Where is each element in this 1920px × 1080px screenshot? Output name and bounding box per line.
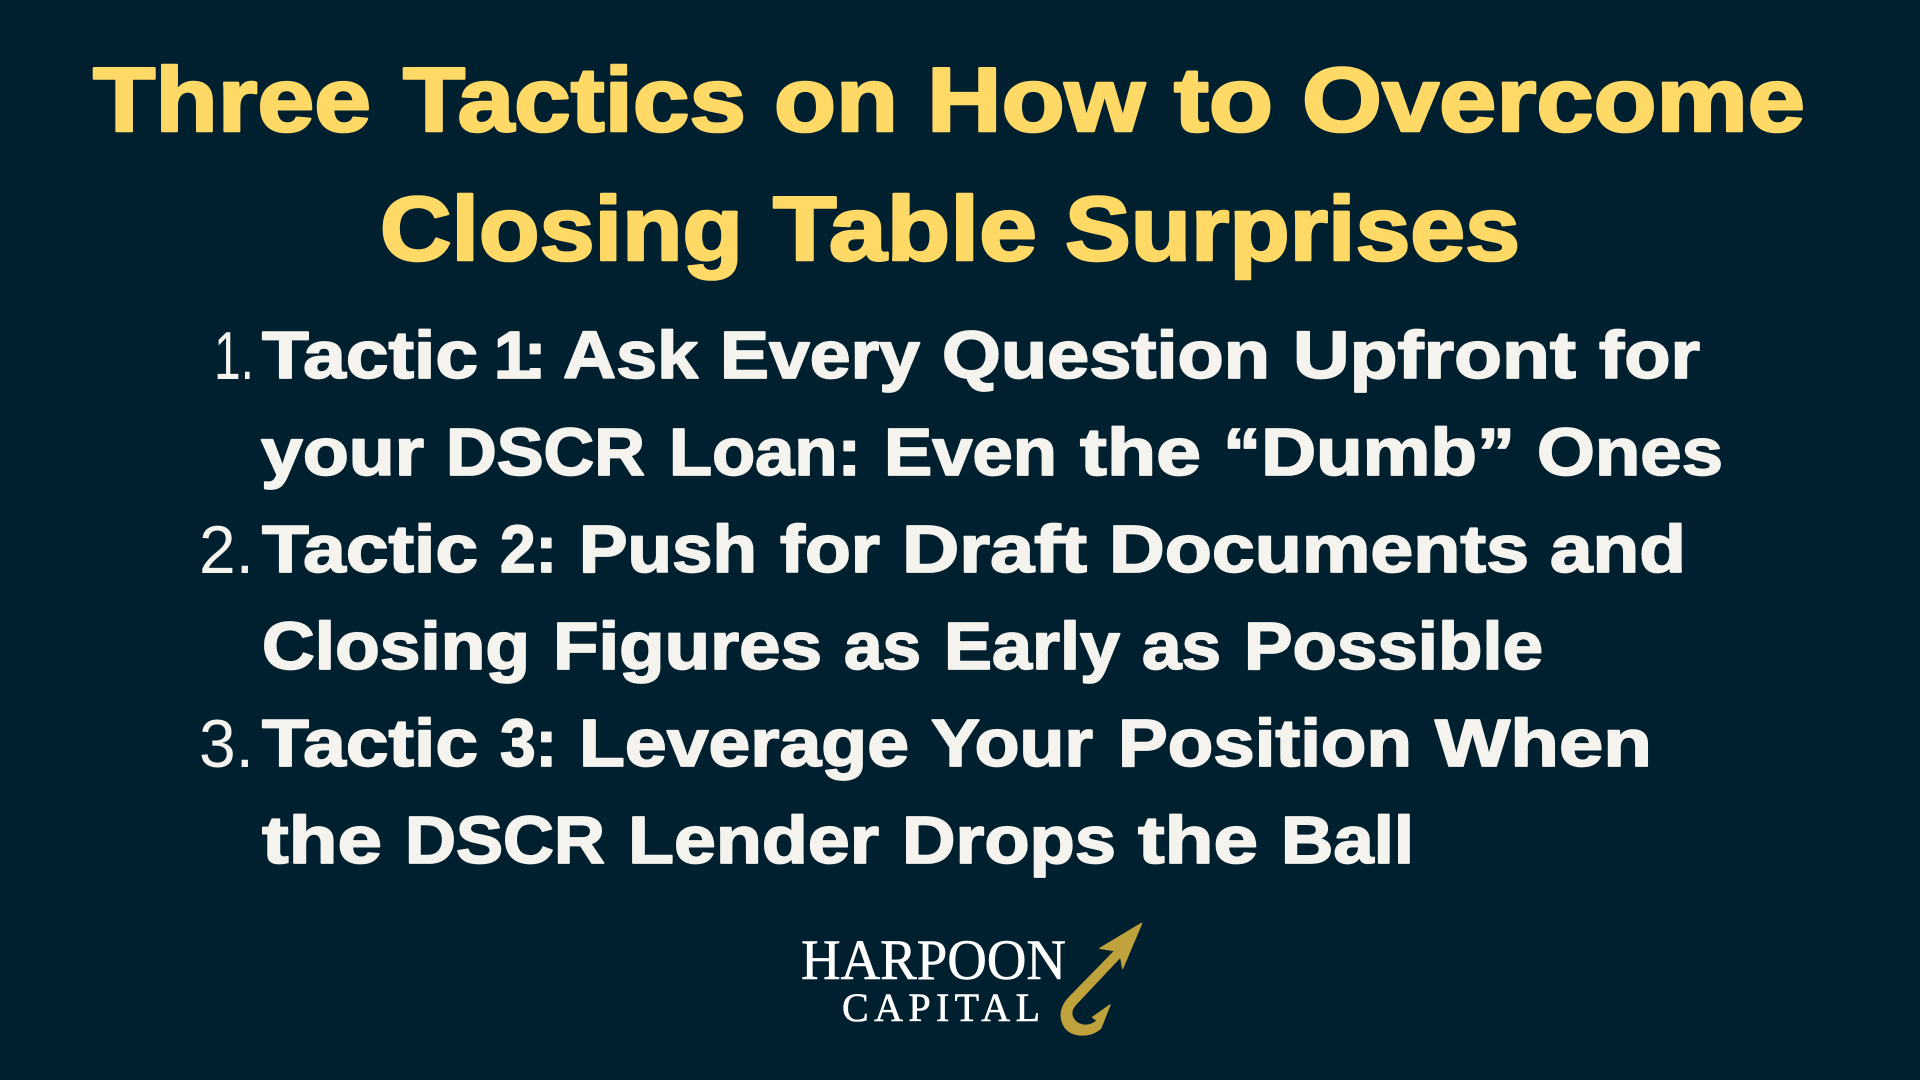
tactic 1: Question [942,318,1270,393]
tactic 3: Tactic [262,706,478,781]
tactic 2: 2. [199,512,254,588]
tactic 1: Ask [563,318,699,393]
tactic 2: as [844,609,921,684]
tactic 2: Documents [1109,512,1529,587]
tactic 2 [199,512,1686,684]
tactic 1: Ones [1537,415,1723,490]
logo wordmark [801,929,1066,1030]
logo wordmark: HARPOON [801,929,1066,992]
tactic 2: Figures [553,609,822,684]
tactic 3: Drops [902,803,1116,878]
title: Closing [380,179,743,280]
tactic 1: Tactic [262,318,478,393]
title: Surprises [1065,179,1520,280]
tactic 3: 3: [500,706,557,781]
tactic 1: DSCR [446,415,645,490]
title [93,50,1805,280]
tactic 1: : [524,318,546,393]
title: on [774,50,898,151]
title: Table [773,179,1037,280]
tactic 1: 1 [494,318,531,393]
tactic 2: as [1142,609,1221,684]
tactics list [199,318,1723,878]
tactic 1: Loan: [669,415,861,490]
tactic 3: Lender [628,803,879,878]
tactic 1: 1. [214,318,254,394]
title: Overcome [1302,50,1805,151]
tactic 1: the [1080,415,1201,490]
tactic 3: When [1435,706,1652,781]
tactic 3: the [262,803,382,878]
tactic 2: Draft [902,512,1087,587]
title: to [1174,50,1273,151]
tactic 1: for [1599,318,1700,393]
tactic 1: your [261,415,424,490]
tactic 2: for [780,512,880,587]
tactic 1: “Dumb” [1223,415,1515,490]
title: Tactics [403,50,746,151]
tactic 2: and [1550,512,1686,587]
tactic 3: Leverage [579,706,909,781]
tactic 1: Every [720,318,920,393]
tactic 1: Upfront [1293,318,1576,393]
tactic 3: Your [931,706,1093,781]
tactic 3 [199,706,1652,878]
tactic 2: Tactic [262,512,478,587]
tactic 3: Position [1118,706,1412,781]
tactic 2: Early [944,609,1120,684]
logo wordmark: CAPITAL [842,985,1040,1030]
tactic 1 [214,318,1723,490]
tactic 2: Possible [1244,609,1543,684]
tactic 3: Ball [1281,803,1414,878]
tactic 3: 3. [199,706,254,782]
icon: gold harpoon hook [1061,923,1142,1035]
tactic 3: DSCR [405,803,605,878]
tactic 2: Closing [262,609,530,684]
tactic 2: 2: [500,512,557,587]
title: How [927,50,1145,151]
tactic 1: Even [884,415,1057,490]
tactic 3: the [1138,803,1258,878]
tactic 2: Push [579,512,757,587]
logo: Harpoon Capital [801,923,1142,1035]
title: Three [93,50,371,151]
